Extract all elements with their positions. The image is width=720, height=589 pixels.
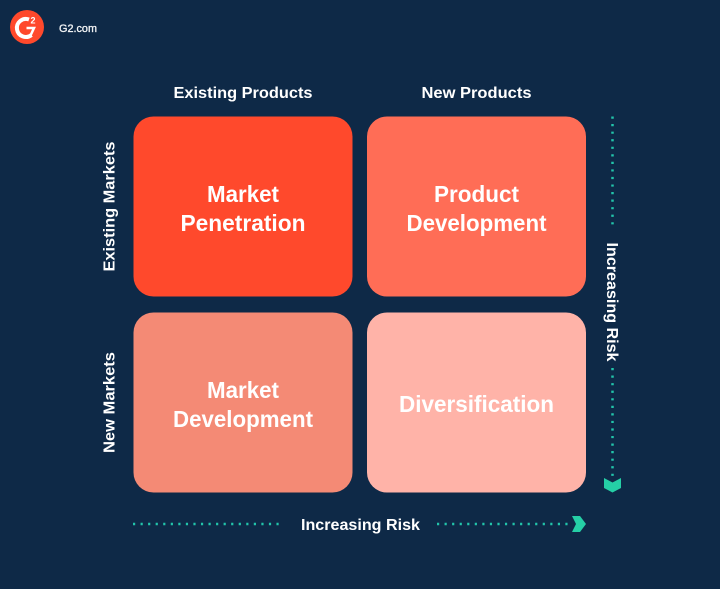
quadrant: Market Penetration xyxy=(134,116,352,296)
quadrant: Diversification xyxy=(367,312,586,492)
quadrant: Market Development: Market xyxy=(207,377,279,403)
label: vertical Increasing Risk: Increasing Risk xyxy=(603,243,620,362)
quadrant: Market Development: Development xyxy=(173,406,313,432)
quadrant: Product Development: Development xyxy=(406,210,547,236)
label: horizontal Increasing Risk: Increasing Risk xyxy=(301,517,420,534)
quadrant: Product Development: Product xyxy=(434,181,519,207)
logo: G2: 2 xyxy=(30,16,36,26)
quadrant: Diversification: Diversification xyxy=(399,391,554,417)
quadrant: Market Development xyxy=(134,312,352,492)
row heading: Existing Markets: Existing Markets xyxy=(102,141,118,272)
arrow: vertical increasing risk xyxy=(604,116,621,492)
quadrant: Market Penetration: Market xyxy=(207,181,279,207)
logo: G2 xyxy=(10,10,44,44)
row heading: New Markets: New Markets xyxy=(102,352,118,453)
quadrant: Product Development xyxy=(367,116,586,296)
logo text: G2.com: G2.com xyxy=(59,23,97,35)
arrow: horizontal increasing risk xyxy=(133,516,586,532)
quadrant: Market Penetration: Penetration xyxy=(180,210,306,236)
column heading: New Products: New Products xyxy=(422,85,532,102)
column heading: Existing Products: Existing Products xyxy=(174,85,313,102)
